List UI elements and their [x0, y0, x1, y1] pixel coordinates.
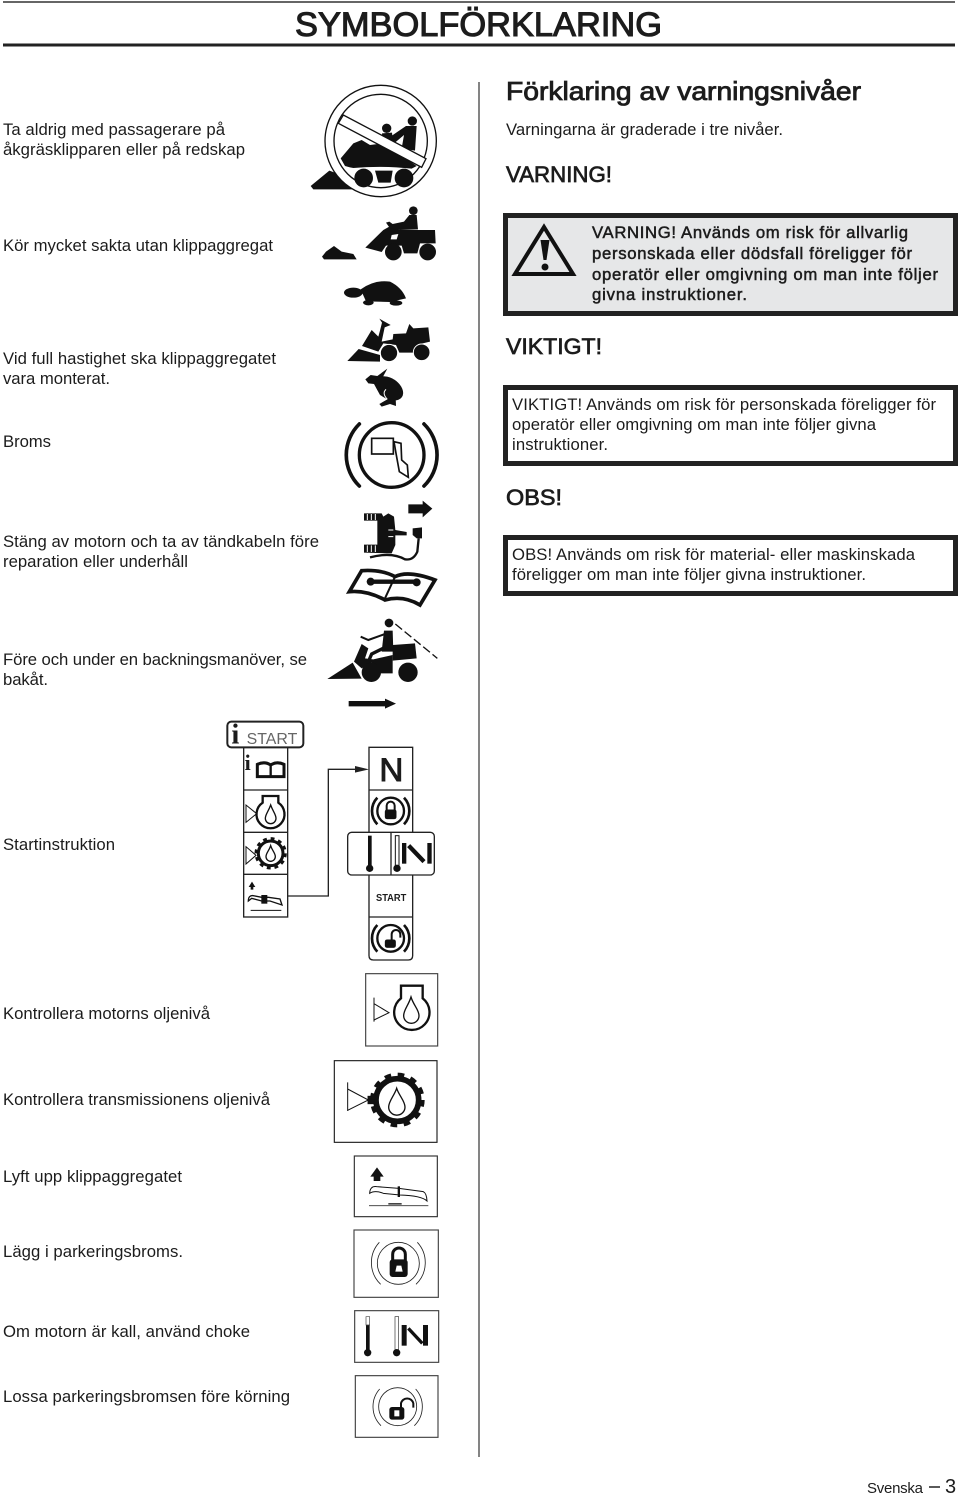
icon: direction arrow [349, 699, 396, 709]
text: stop engine: reparation eller underhåll [3, 552, 188, 571]
icon: brake pedal [346, 423, 437, 487]
text: warning body: personskada eller dödsfall föreligger för [592, 244, 912, 263]
text: full speed [3, 349, 276, 388]
text: no passengers [3, 120, 245, 159]
icon: warning triangle [515, 227, 573, 274]
title: SYMBOLFÖRKLARING [295, 6, 662, 44]
icon: choke when cold [355, 1311, 439, 1362]
connector arrow [288, 766, 369, 896]
text: reversing: Före och under en backningsmanöver, se [3, 650, 307, 669]
icon: mower with driver, cutter removed [322, 206, 436, 260]
footer page number [867, 1476, 956, 1494]
text: brake: Broms [3, 432, 51, 451]
panel: important box: operatör eller omgivning om man inte följer givna [512, 415, 877, 434]
icon: start badge: i [231, 718, 239, 750]
text: stop engine: Stäng av motorn och ta av tändkabeln före [3, 532, 319, 551]
icon: lift cutter [354, 1156, 437, 1217]
heading: notice: OBS! [506, 485, 562, 510]
panel: warning box [506, 216, 956, 314]
icon: release parking brake [355, 1376, 438, 1437]
text: reversing: bakåt. [3, 670, 48, 689]
text: reversing [3, 650, 307, 689]
panel: notice box: föreligger om man inte följer givna instruktioner. [512, 565, 866, 584]
panel: important box: instruktioner. [512, 435, 608, 454]
text: full speed: vara monterat. [3, 369, 110, 388]
icon: turtle [344, 281, 406, 306]
icon: start badge: START [247, 731, 298, 748]
panel: notice box [506, 538, 956, 594]
icon: read manual [245, 750, 284, 777]
text: lift cutter: Lyft upp klippaggregatet [3, 1167, 182, 1186]
heading: important: VIKTIGT! [506, 334, 602, 359]
text: choke: Om motorn är kall, använd choke [3, 1322, 250, 1341]
right column heading: Förklaring av varningsnivåer [506, 76, 861, 106]
icon: service book with wrench [349, 570, 435, 605]
text: stop engine [3, 532, 319, 571]
panel: important box: VIKTIGT! Används om risk för personskada föreligger för [512, 395, 936, 414]
text: full speed: Vid full hastighet ska klippaggregatet [3, 349, 276, 368]
panel: notice box: OBS! Används om risk för material- eller maskinskada [512, 545, 916, 564]
left column text [3, 120, 319, 1406]
text: parking brake: Lägg i parkeringsbroms. [3, 1242, 183, 1261]
text: warning body: givna instruktioner. [592, 285, 747, 304]
symbol: neutral: N [379, 751, 403, 788]
text: no passengers: Ta aldrig med passagerare på [3, 120, 226, 139]
icon: transmission oil level [334, 1061, 437, 1142]
text: warning body [592, 223, 938, 304]
panel: important box [506, 388, 956, 464]
text: release brake: Lossa parkeringsbromsen före körning [3, 1387, 290, 1406]
text: drive slowly: Kör mycket sakta utan klippaggregat [3, 236, 273, 255]
left column of start symbols [227, 718, 303, 917]
text: intro: Varningarna är graderade i tre nivåer. [506, 120, 783, 139]
icon: gear oil small [246, 839, 285, 868]
icon: start badge [227, 718, 303, 750]
text: transmission oil: Kontrollera transmissionens oljenivå [3, 1090, 271, 1109]
text: start label: START [376, 893, 406, 904]
icon: engine oil level [366, 974, 438, 1046]
icon: parking brake lock [372, 798, 409, 824]
text: warning body: operatör eller omgivning om man inte följer [592, 265, 938, 284]
text: warning body: VARNING! Används om risk för allvarlig [592, 223, 908, 242]
icon: rabbit [365, 369, 408, 407]
icon: engine oil small [246, 796, 284, 828]
icon: read manual: i [245, 750, 251, 775]
text: start instruction: Startinstruktion [3, 835, 115, 854]
icon: mower with cutter at full speed [347, 319, 430, 362]
icon: parking brake unlock [372, 925, 409, 952]
icon: engine with spark plug cable and arrow [364, 501, 432, 560]
right column of start symbols [348, 747, 434, 960]
heading: warning: VARNING! [506, 162, 612, 187]
icon: reversing mower with sight line [327, 619, 437, 682]
text: engine oil: Kontrollera motorns oljenivå [3, 1004, 211, 1023]
icon: lift cutter small [248, 882, 282, 910]
icon: no passengers on mower [311, 85, 436, 197]
start instruction diagram [227, 718, 434, 960]
text: no passengers: åkgräsklipparen eller på redskap [3, 140, 245, 159]
icon: parking brake [354, 1230, 438, 1297]
icon: choke temperature panel [348, 832, 434, 875]
